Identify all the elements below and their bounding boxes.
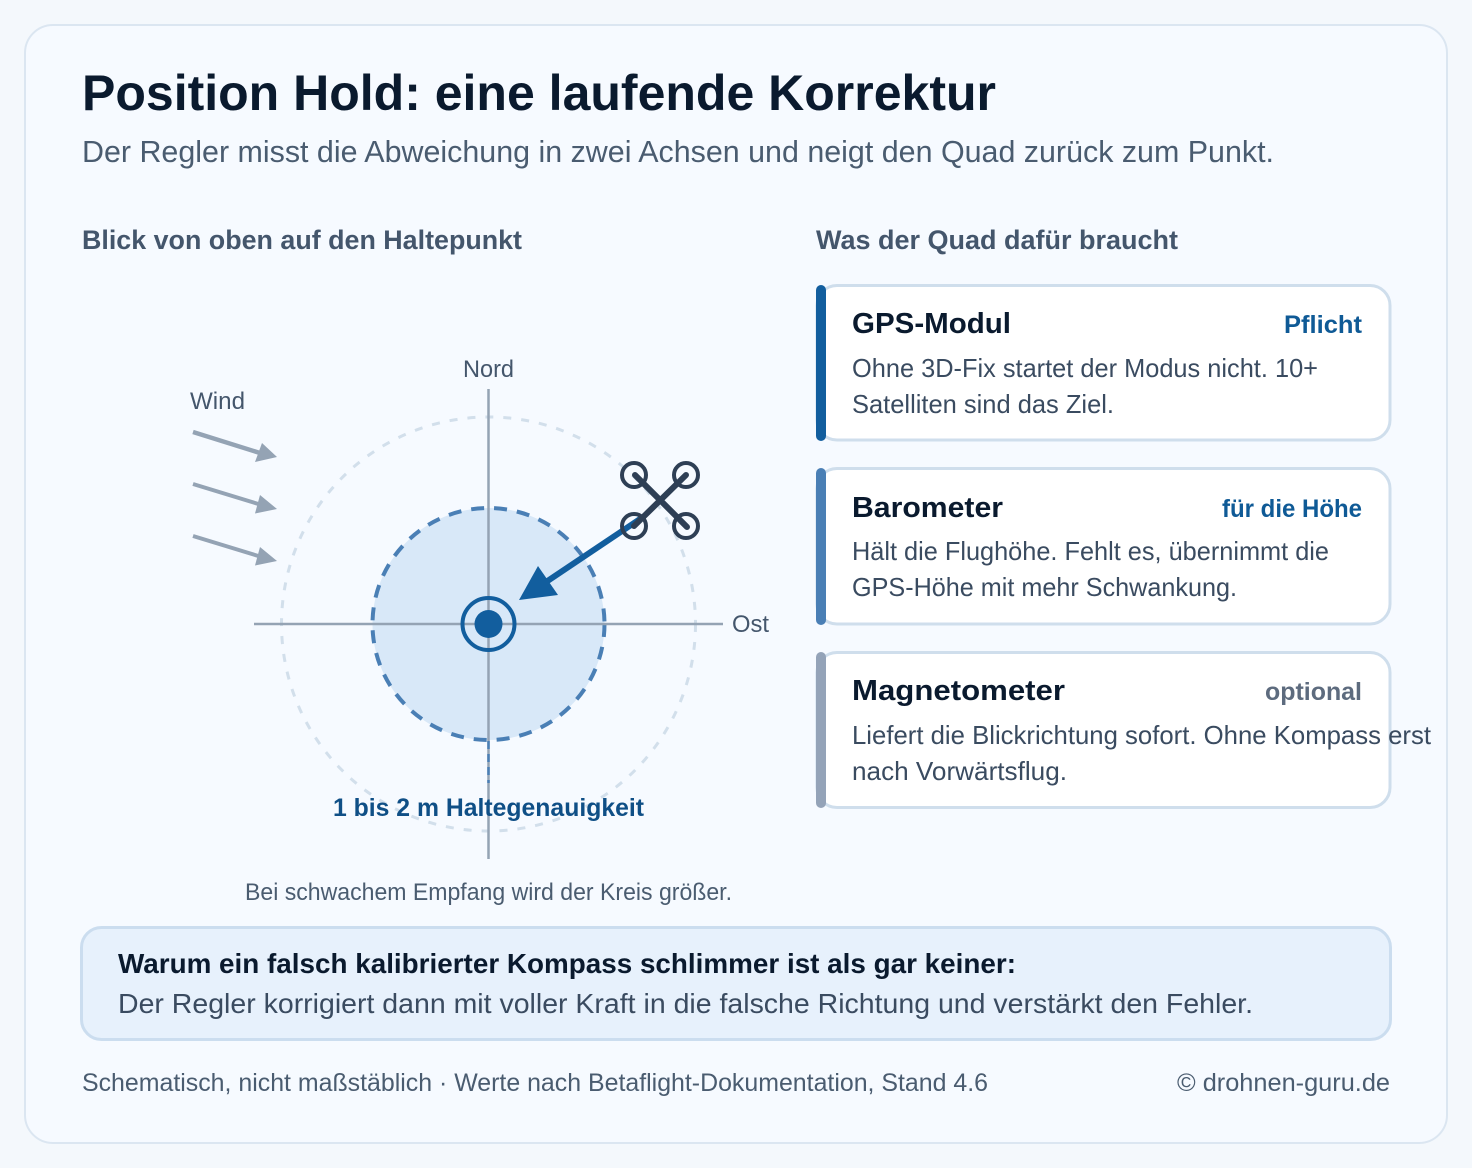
card text: Hält die Flughöhe. Fehlt es, übernimmt die [852, 536, 1329, 566]
outer dashed circle [282, 417, 696, 831]
callout heading: Warum ein falsch kalibrierter Kompass schlimmer ist als gar keiner: [118, 948, 1016, 979]
card title: Barometer [852, 492, 1003, 524]
callout text: Der Regler korrigiert dann mit voller Kraft in die falsche Richtung und verstärkt den Fehler. [118, 988, 1253, 1019]
target marker [462, 598, 514, 650]
heading: right column: Was der Quad dafür braucht [816, 225, 1178, 255]
inner accuracy circle [372, 508, 604, 740]
card tag: für die Höhe [1222, 495, 1362, 523]
footer: source note: Schematisch, nicht maßstäblich · Werte nach Betaflight-Dokumentation, Stand 4.6 [82, 1069, 988, 1097]
diagram: top view of hold point [190, 356, 769, 859]
caption below diagram: Bei schwachem Empfang wird der Kreis größer. [245, 879, 732, 906]
panel: Barometer [816, 468, 1390, 625]
callout: compass warning [82, 928, 1390, 1040]
panel: Barometer: GPS-Höhe mit mehr Schwankung. [852, 572, 1237, 602]
card text: Liefert die Blickrichtung sofort. Ohne Kompass erst [852, 720, 1432, 750]
panel: Magnetometer: nach Vorwärtsflug. [852, 756, 1067, 786]
card tag: optional [1265, 678, 1362, 706]
label: accuracy: 1 bis 2 m Haltegenauigkeit [333, 794, 645, 822]
card tag: Pflicht [1284, 311, 1363, 339]
card text: Ohne 3D-Fix startet der Modus nicht. 10+ [852, 353, 1318, 383]
label: Nord: Nord [463, 356, 514, 383]
correction arrow [519, 519, 640, 600]
heading: left column: Blick von oben auf den Haltepunkt [82, 225, 522, 255]
wind arrows [193, 432, 277, 566]
panel: GPS-Modul: Satelliten sind das Ziel. [852, 389, 1114, 419]
icon: quadcopter [622, 463, 698, 538]
footer: copyright: © drohnen-guru.de [1177, 1069, 1390, 1097]
leader line [487, 741, 490, 783]
axis north-south [487, 389, 490, 859]
panel: GPS-Modul [816, 285, 1390, 441]
title: Position Hold: eine laufende Korrektur [82, 65, 996, 121]
label: Ost: Ost [732, 611, 769, 638]
label: Wind: Wind [190, 388, 245, 415]
card title: GPS-Modul [852, 308, 1011, 340]
panel: Magnetometer [816, 652, 1432, 808]
axis east-west [254, 623, 723, 625]
card title: Magnetometer [852, 675, 1065, 707]
subtitle: Der Regler misst die Abweichung in zwei Achsen und neigt den Quad zurück zum Punkt. [82, 134, 1274, 169]
